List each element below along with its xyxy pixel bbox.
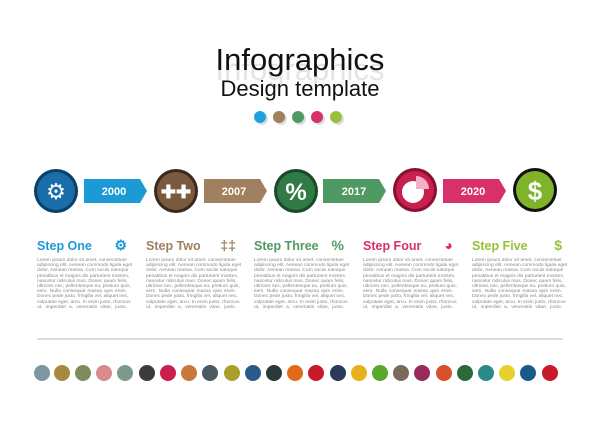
step five: nascetur ridiculus mus. Donec quam felis, bbox=[472, 279, 563, 284]
icon: puzzle bbox=[154, 169, 198, 213]
step one: sem. Nulla consequat massa quis enim. bbox=[37, 289, 127, 294]
step five: dolor. Aenean massa. Cum sociis natoque bbox=[472, 268, 563, 273]
step three: Donec pede justo, fringilla vel, aliquet nec, bbox=[254, 294, 346, 299]
step five: ultricies nec, pellentesque eu, pretium quis, bbox=[472, 284, 566, 289]
step five: penatibus et magnis dis parturient montes, bbox=[472, 274, 564, 279]
step two: adipiscing elit. Aenean commodo ligula eget bbox=[146, 263, 241, 268]
step one: Step One bbox=[37, 239, 92, 253]
step four bbox=[363, 237, 458, 310]
step two: Lorem ipsum dolor sit amet, consectetuer bbox=[146, 258, 236, 263]
step three: dolor. Aenean massa. Cum sociis natoque bbox=[254, 268, 345, 273]
step five: vulputate eget, arcu. In enim justo, rhoncus bbox=[472, 300, 566, 304]
step one: ⚙ bbox=[114, 237, 127, 253]
title: Infographics bbox=[216, 42, 384, 77]
step two: vulputate eget, arcu. In enim justo, rhoncus bbox=[146, 300, 240, 304]
step two: ut, imperdiet a, venenatis vitae, justo. bbox=[146, 305, 236, 310]
arrow 2007: 2007 bbox=[222, 186, 246, 198]
step one: Donec pede justo, fringilla vel, aliquet nec, bbox=[37, 294, 129, 299]
step five: $ bbox=[554, 237, 562, 253]
step one: penatibus et magnis dis parturient montes, bbox=[37, 274, 129, 279]
step three: vulputate eget, arcu. In enim justo, rhoncus bbox=[254, 300, 348, 304]
step three: adipiscing elit. Aenean commodo ligula eget bbox=[254, 263, 349, 268]
step two: Donec pede justo, fringilla vel, aliquet nec, bbox=[146, 294, 238, 299]
step five: Step Five bbox=[472, 239, 528, 253]
colour dots bbox=[254, 111, 344, 125]
step one: Lorem ipsum dolor sit amet, consectetuer bbox=[37, 258, 127, 263]
step three: nascetur ridiculus mus. Donec quam felis, bbox=[254, 279, 345, 284]
step one: ut, imperdiet a, venenatis vitae, justo. bbox=[37, 305, 127, 310]
title shadow: Infographics bbox=[216, 52, 384, 87]
arrow 2020 bbox=[443, 179, 506, 203]
step four: ◕ bbox=[445, 237, 453, 253]
arrow 2017 bbox=[323, 179, 386, 203]
step two: nascetur ridiculus mus. Donec quam felis, bbox=[146, 279, 237, 284]
step four: Donec pede justo, fringilla vel, aliquet nec, bbox=[363, 294, 455, 299]
icon: pie bbox=[393, 168, 437, 212]
step four: sem. Nulla consequat massa quis enim. bbox=[363, 289, 453, 294]
step two: dolor. Aenean massa. Cum sociis natoque bbox=[146, 268, 237, 273]
arrow 2000: 2000 bbox=[102, 186, 126, 198]
step four: penatibus et magnis dis parturient montes, bbox=[363, 274, 455, 279]
step five: Donec pede justo, fringilla vel, aliquet nec, bbox=[472, 294, 564, 299]
step one: ultricies nec, pellentesque eu, pretium quis, bbox=[37, 284, 131, 289]
step three: sem. Nulla consequat massa quis enim. bbox=[254, 289, 344, 294]
step two: penatibus et magnis dis parturient montes, bbox=[146, 274, 238, 279]
step five: adipiscing elit. Aenean commodo ligula eget bbox=[472, 263, 567, 268]
step four: Lorem ipsum dolor sit amet, consectetuer bbox=[363, 258, 453, 263]
step three: ultricies nec, pellentesque eu, pretium quis, bbox=[254, 284, 348, 289]
step one bbox=[37, 237, 132, 310]
arrow 2017: 2017 bbox=[342, 186, 366, 198]
step four: Step Four bbox=[363, 239, 421, 253]
step four: ut, imperdiet a, venenatis vitae, justo. bbox=[363, 305, 453, 310]
arrow 2020: 2020 bbox=[461, 186, 485, 198]
step four: vulputate eget, arcu. In enim justo, rhoncus bbox=[363, 300, 457, 304]
arrow 2007 bbox=[204, 179, 267, 203]
icon row bbox=[34, 365, 558, 381]
step one: dolor. Aenean massa. Cum sociis natoque bbox=[37, 268, 128, 273]
step three bbox=[254, 237, 350, 310]
step five bbox=[472, 237, 568, 310]
icon: gears bbox=[34, 169, 78, 213]
step two bbox=[146, 237, 242, 310]
step three: Lorem ipsum dolor sit amet, consectetuer bbox=[254, 258, 344, 263]
step one: adipiscing elit. Aenean commodo ligula eget bbox=[37, 263, 132, 268]
step one: nascetur ridiculus mus. Donec quam felis, bbox=[37, 279, 128, 284]
step four: adipiscing elit. Aenean commodo ligula eget bbox=[363, 263, 458, 268]
step one: vulputate eget, arcu. In enim justo, rhoncus bbox=[37, 300, 131, 304]
icon: puzzle: ✚✚ bbox=[161, 182, 191, 202]
step five: Lorem ipsum dolor sit amet, consectetuer bbox=[472, 258, 562, 263]
icon: dollar bbox=[513, 168, 557, 212]
step three: penatibus et magnis dis parturient montes, bbox=[254, 274, 346, 279]
step three: % bbox=[332, 237, 344, 253]
icon: percent: % bbox=[285, 179, 307, 206]
step two: ‡‡ bbox=[220, 237, 236, 253]
step two: ultricies nec, pellentesque eu, pretium quis, bbox=[146, 284, 240, 289]
step two: Step Two bbox=[146, 239, 201, 253]
icon: percent bbox=[274, 169, 318, 213]
step four: nascetur ridiculus mus. Donec quam felis, bbox=[363, 279, 454, 284]
arrow 2000 bbox=[84, 179, 147, 203]
subtitle: Design template bbox=[220, 76, 379, 101]
step three: ut, imperdiet a, venenatis vitae, justo. bbox=[254, 305, 344, 310]
step five: ut, imperdiet a, venenatis vitae, justo. bbox=[472, 305, 562, 310]
step three: Step Three bbox=[254, 239, 319, 253]
step four: ultricies nec, pellentesque eu, pretium quis, bbox=[363, 284, 457, 289]
step five: sem. Nulla consequat massa quis enim. bbox=[472, 289, 562, 294]
step four: dolor. Aenean massa. Cum sociis natoque bbox=[363, 268, 454, 273]
icon: gears: ⚙ bbox=[46, 179, 66, 204]
icon: dollar: $ bbox=[528, 176, 543, 206]
step two: sem. Nulla consequat massa quis enim. bbox=[146, 289, 236, 294]
